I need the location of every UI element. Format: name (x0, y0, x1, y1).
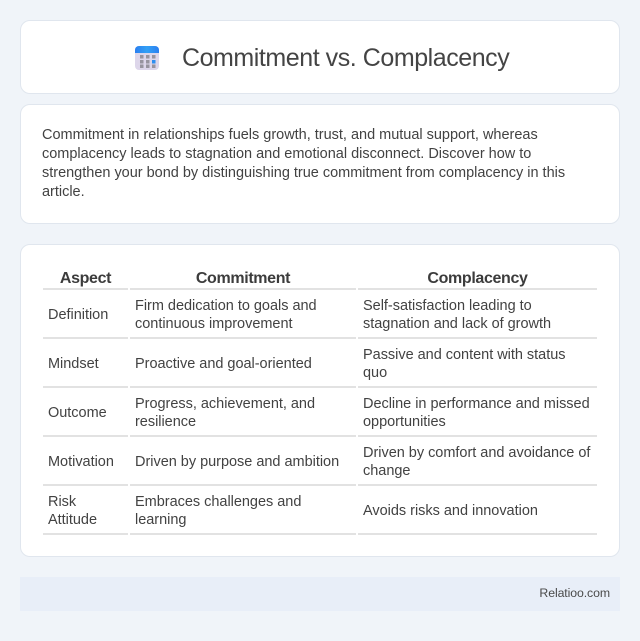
row: mindset: quo (363, 365, 387, 381)
row: risk attitude: Attitude (48, 512, 97, 528)
row: mindset (48, 347, 566, 381)
panel: comparison table (20, 244, 620, 557)
row: risk attitude (48, 494, 538, 528)
table header: Aspect (60, 270, 111, 287)
row: risk attitude: Embraces challenges and (135, 494, 301, 510)
row: motivation: change (363, 463, 410, 479)
row: definition: continuous improvement (135, 316, 293, 332)
intro text: complacency leads to stagnation and emotional disconnect. Discover how to (42, 146, 531, 162)
table header: Complacency (427, 270, 528, 287)
panel: introduction (20, 104, 620, 224)
row: risk attitude: Avoids risks and innovation (363, 503, 538, 519)
row: definition (48, 298, 551, 332)
intro text: Commitment in relationships fuels growth, trust, and mutual support, whereas (42, 127, 538, 143)
row: outcome (48, 396, 590, 430)
panel: title card (20, 20, 620, 94)
row: outcome: Outcome (48, 405, 107, 421)
table header: Commitment (196, 270, 290, 287)
row: outcome: Progress, achievement, and (135, 396, 315, 412)
table header (60, 270, 528, 287)
footer bar (20, 577, 620, 611)
row: definition: Definition (48, 307, 108, 323)
row: motivation (48, 445, 590, 479)
row: risk attitude: learning (135, 512, 186, 528)
row: mindset: Mindset (48, 356, 99, 372)
row: mindset: Passive and content with status (363, 347, 566, 363)
row: risk attitude: Risk (48, 494, 76, 510)
row: outcome: opportunities (363, 414, 446, 430)
row: definition: Self-satisfaction leading to (363, 298, 532, 314)
row: mindset: Proactive and goal-oriented (135, 356, 312, 372)
row: definition: stagnation and lack of growth (363, 316, 551, 332)
row: definition: Firm dedication to goals and (135, 298, 317, 314)
icon: calendar (135, 46, 159, 70)
intro text (42, 127, 565, 200)
row: motivation: Motivation (48, 454, 114, 470)
intro text: strengthen your bond by distinguishing true commitment from complacency in this (42, 165, 565, 181)
footer credit: Relatioo.com (539, 586, 610, 600)
intro text: article. (42, 184, 85, 200)
row: outcome: resilience (135, 414, 196, 430)
row: outcome: Decline in performance and missed (363, 396, 590, 412)
title: Commitment vs. Complacency (182, 44, 509, 72)
row: motivation: Driven by comfort and avoidance of (363, 445, 590, 461)
row: motivation: Driven by purpose and ambition (135, 454, 339, 470)
